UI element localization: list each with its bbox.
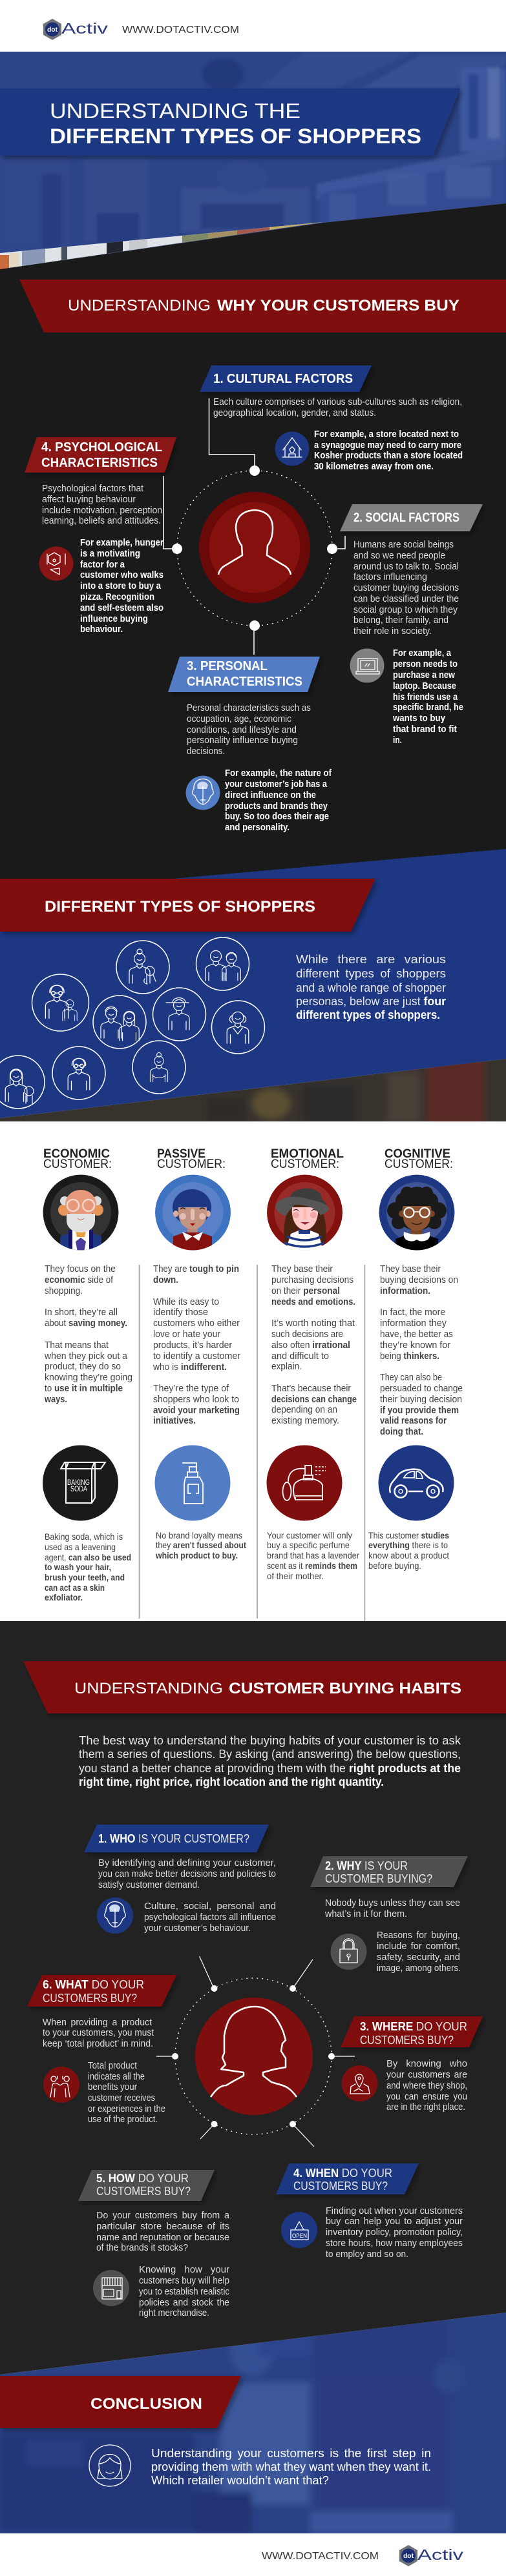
hero photo background bbox=[0, 52, 506, 271]
body text: products, it’s harder bbox=[153, 1340, 232, 1351]
central diagram: buyer silhouette bbox=[156, 1956, 355, 2147]
heading: CUSTOMER: bbox=[385, 1158, 453, 1171]
example text: to wash your hair, bbox=[45, 1562, 111, 1572]
panel: how do your customers buy: of the brands it stocks? bbox=[96, 2242, 188, 2253]
example text: which product to buy. bbox=[155, 1550, 238, 1560]
panel: personal characteristics: For example, the nature of bbox=[225, 768, 332, 779]
panel: psychological characteristics: is a motivating bbox=[80, 548, 140, 559]
body text: avoid your marketing bbox=[153, 1405, 240, 1416]
heading: COGNITIVE bbox=[385, 1147, 450, 1161]
panel: cultural factors: geographical location, gender, and status. bbox=[213, 407, 376, 418]
heading: CUSTOMER: bbox=[271, 1158, 339, 1171]
panel: what do your customers buy: or experiences in the bbox=[88, 2103, 165, 2114]
panel: why is your customer buying: Nobody buys unless they can see bbox=[325, 1897, 460, 1908]
diagram ring with central person bbox=[163, 398, 345, 655]
body text: information. bbox=[380, 1285, 430, 1296]
heading: CUSTOMER: bbox=[157, 1158, 226, 1171]
body text: to identify a customer bbox=[153, 1351, 240, 1362]
panel: social factors: can be classified under the bbox=[353, 593, 459, 604]
body text: decisions can change bbox=[271, 1394, 357, 1405]
panel: psychological characteristics: affect buying behaviour bbox=[42, 494, 136, 505]
panel: personal characteristics: decisions. bbox=[187, 746, 225, 757]
panel: social factors: in. bbox=[393, 735, 402, 746]
body text: depending on an bbox=[271, 1404, 337, 1415]
body text: also often irrational bbox=[271, 1340, 350, 1351]
intro text: and a whole range of shopper bbox=[296, 981, 446, 994]
panel: cultural factors: Each culture comprises of various sub-cultures such as religion, bbox=[213, 396, 462, 407]
conclusion banner: CONCLUSION bbox=[90, 2395, 202, 2413]
panel: psychological characteristics: learning, beliefs and attitudes. bbox=[42, 515, 161, 526]
body text: customers who either bbox=[153, 1318, 240, 1329]
body text: They base their bbox=[271, 1263, 333, 1274]
example text: This customer studies bbox=[368, 1530, 449, 1540]
panel: who is your customer: psychological factors all influence bbox=[144, 1912, 276, 1923]
header logo bbox=[43, 19, 109, 40]
footer logo: dot bbox=[403, 2553, 414, 2560]
example text: used as a leavening bbox=[45, 1542, 116, 1552]
dark section background: buying habits bbox=[0, 1621, 506, 2375]
shopper persona icons bbox=[0, 937, 265, 1109]
example text: brand that has a lavender bbox=[267, 1550, 359, 1560]
body text: if you provide them bbox=[380, 1405, 459, 1416]
body text: purchasing decisions bbox=[271, 1274, 353, 1285]
heading: EMOTIONAL bbox=[271, 1147, 344, 1161]
icon: dinner plate bbox=[39, 546, 74, 581]
panel: social factors: social group to which they bbox=[353, 604, 458, 615]
icon: map pin bbox=[341, 2065, 377, 2101]
panel: personal characteristics: Personal characteristics such as bbox=[187, 702, 311, 713]
panel: when do your customers buy bbox=[276, 2163, 463, 2260]
body text: product, they do so bbox=[45, 1361, 121, 1372]
conclusion banner bbox=[0, 2376, 241, 2428]
panel: psychological characteristics: behaviour. bbox=[80, 624, 123, 635]
column: passive customer bbox=[153, 1147, 246, 1560]
column: emotional customer bbox=[266, 1147, 359, 1581]
avatar: woman with blue bob bbox=[155, 1175, 231, 1251]
panel: psychological characteristics: For example, hunger bbox=[80, 537, 163, 548]
panel: where do your customers buy: your customers are bbox=[386, 2069, 467, 2080]
heading: ECONOMIC bbox=[43, 1147, 110, 1161]
body text bbox=[153, 1263, 240, 1426]
intro paragraph: The best way to understand the buying habits of your customer is to ask bbox=[79, 1734, 461, 1747]
intro paragraph: right time, right price, right location and the right quantity. bbox=[79, 1775, 384, 1788]
panel: who is your customer: 1. WHO IS YOUR CUSTOMER? bbox=[98, 1832, 249, 1845]
panel: who is your customer: your customer’s behaviour. bbox=[144, 1923, 251, 1934]
section banner: DIFFERENT TYPES OF SHOPPERS bbox=[45, 898, 315, 915]
panel: social factors: factors influencing bbox=[353, 571, 427, 582]
hero title banner: UNDERSTANDING THE bbox=[50, 99, 300, 123]
conclusion text bbox=[151, 2447, 431, 2487]
panel: what do your customers buy: Total product bbox=[88, 2060, 138, 2071]
panel: what do your customers buy bbox=[27, 1975, 176, 2125]
icon: synagogue bbox=[275, 431, 309, 466]
body text: such decisions are bbox=[271, 1329, 343, 1340]
panel: what do your customers buy: CUSTOMERS BUY? bbox=[43, 1992, 137, 2005]
panel: why is your customer buying: include for comfort, bbox=[377, 1941, 460, 1952]
panel: personal characteristics: personality influence buying bbox=[187, 735, 298, 746]
section banner: customer buying habits: CUSTOMER BUYING HABITS bbox=[229, 1680, 461, 1697]
panel: where do your customers buy bbox=[341, 2016, 483, 2112]
panel: psychological characteristics bbox=[25, 437, 176, 635]
panel: what do your customers buy: to your customers, you must bbox=[43, 2027, 154, 2038]
intro text: While there are various bbox=[296, 953, 446, 966]
panel: when do your customers buy: to employ and so on. bbox=[326, 2249, 408, 2260]
panel: social factors: Humans are social beings bbox=[353, 539, 454, 550]
panel: how do your customers buy: Knowing how your bbox=[139, 2264, 229, 2275]
panel: why is your customer buying: 2. WHY IS YOUR bbox=[325, 1859, 408, 1872]
heading bbox=[385, 1147, 453, 1171]
body text: have, the better as bbox=[380, 1329, 453, 1340]
panel: personal characteristics: occupation, age, economic bbox=[187, 713, 291, 724]
panel: how do your customers buy: you to establish realistic bbox=[139, 2286, 229, 2297]
panel: why is your customer buying: CUSTOMER BUYING? bbox=[325, 1872, 432, 1885]
body text: shoppers who look to bbox=[153, 1394, 239, 1405]
panel: cultural factors: 1. CULTURAL FACTORS bbox=[213, 372, 353, 386]
intro paragraph: you stand a better chance at providing them with the right products at the bbox=[79, 1762, 461, 1775]
panel: how do your customers buy: 5. HOW DO YOUR bbox=[96, 2172, 189, 2185]
body text: on their personal bbox=[271, 1285, 340, 1296]
body text: explain. bbox=[271, 1361, 302, 1372]
icon: open sign: OPEN bbox=[292, 2233, 307, 2239]
dark photo strip behind shopper types bbox=[0, 1059, 506, 1121]
icon: laptop bbox=[350, 648, 384, 683]
header url: WWW.DOTACTIV.COM bbox=[122, 25, 239, 36]
column dividers bbox=[140, 1265, 364, 1626]
heading bbox=[157, 1147, 226, 1171]
column: economic customer bbox=[43, 1147, 132, 1602]
panel: psychological characteristics: 4. PSYCHOLOGICAL bbox=[41, 440, 162, 455]
panel: social factors: belong, their family, and bbox=[353, 615, 448, 626]
panel: psychological characteristics: pizza. Recognition bbox=[80, 591, 154, 602]
panel: what do your customers buy: keep ‘total product’ in mind. bbox=[43, 2038, 153, 2049]
body text: when they pick out a bbox=[44, 1351, 128, 1362]
panel: personal characteristics: buy. So too does their age bbox=[225, 811, 329, 822]
icon: head with brain bbox=[97, 1897, 133, 1934]
panel: psychological characteristics: Psychological factors that bbox=[42, 483, 144, 494]
icon: baking soda box bbox=[43, 1445, 118, 1521]
conclusion photo background bbox=[0, 2305, 506, 2537]
body text bbox=[44, 1263, 132, 1405]
icon: baking soda box: SODA bbox=[70, 1484, 87, 1493]
section banner: customer buying habits bbox=[23, 1661, 506, 1713]
body text: being thinkers. bbox=[380, 1351, 439, 1362]
body text: information they bbox=[380, 1318, 447, 1329]
panel: social factors: customer buying decisions bbox=[353, 582, 459, 593]
icon: storefront bbox=[93, 2270, 129, 2306]
example text: before buying. bbox=[368, 1560, 421, 1571]
panel: psychological characteristics: and self-esteem also bbox=[80, 602, 163, 613]
body text: shopping. bbox=[45, 1285, 83, 1296]
body text: They focus on the bbox=[45, 1263, 116, 1274]
panel: how do your customers buy: CUSTOMERS BUY? bbox=[96, 2185, 191, 2198]
panel: who is your customer bbox=[84, 1825, 276, 1934]
panel: how do your customers buy bbox=[78, 2170, 230, 2318]
panel: where do your customers buy: CUSTOMERS BUY? bbox=[360, 2034, 454, 2047]
body text: knowing they’re going bbox=[45, 1372, 132, 1383]
section banner: why your customers buy bbox=[19, 280, 506, 332]
panel: why is your customer buying: safety, security, and bbox=[377, 1952, 460, 1963]
example text: exfoliator. bbox=[45, 1592, 83, 1602]
icon: pump bottle bbox=[155, 1445, 230, 1521]
body text: their buying decision bbox=[380, 1394, 462, 1405]
example text bbox=[368, 1530, 449, 1571]
intro paragraph: them a series of questions. By asking (and answering) the below questions, bbox=[79, 1748, 461, 1761]
icon: woman face bbox=[89, 2445, 131, 2486]
body text: In short, they’re all bbox=[45, 1307, 118, 1318]
example text: No brand loyalty means bbox=[156, 1530, 242, 1540]
hero title banner bbox=[0, 88, 460, 156]
body text bbox=[380, 1263, 463, 1437]
panel: cultural factors bbox=[200, 365, 463, 472]
example text: brush your teeth, and bbox=[45, 1572, 125, 1582]
example text: everything there is to bbox=[368, 1540, 448, 1550]
panel: what do your customers buy: use of the product. bbox=[88, 2114, 158, 2125]
body text: identify those bbox=[153, 1307, 208, 1318]
avatar: woman with hat bbox=[267, 1175, 343, 1251]
example text: know about a product bbox=[368, 1550, 449, 1560]
avatar: old man bbox=[43, 1175, 119, 1252]
body text: ways. bbox=[44, 1394, 67, 1405]
panel: how do your customers buy: name and reputation or because bbox=[96, 2232, 229, 2243]
body text: about saving money. bbox=[45, 1318, 127, 1329]
body text: While its easy to bbox=[153, 1296, 219, 1307]
icon: open sign bbox=[281, 2212, 317, 2248]
panel: when do your customers buy: inventory policy, promotion policy, bbox=[326, 2227, 463, 2238]
panel: who is your customer: satisfy customer demand. bbox=[98, 1879, 200, 1890]
panel: psychological characteristics: influence buying bbox=[80, 613, 148, 624]
panel: how do your customers buy: right merchandise. bbox=[139, 2307, 209, 2318]
conclusion text: providing them with what they want when they want it. bbox=[151, 2460, 431, 2473]
intro text: personas, below are just four bbox=[296, 995, 446, 1008]
panel: social factors: their role in society. bbox=[353, 626, 432, 637]
hero title banner: DIFFERENT TYPES OF SHOPPERS bbox=[50, 125, 421, 148]
body text: That’s because their bbox=[271, 1383, 351, 1394]
panel: personal characteristics: and personality. bbox=[225, 822, 290, 833]
panel: cultural factors: a synagogue may need to carry more bbox=[314, 440, 461, 451]
panel: when do your customers buy: 4. WHEN DO YOUR bbox=[293, 2167, 392, 2180]
panel: cultural factors: Kosher products than a store located bbox=[314, 450, 463, 461]
panel: psychological characteristics: include motivation, perception, bbox=[42, 505, 165, 516]
panel: what do your customers buy: indicates all the bbox=[88, 2071, 145, 2082]
example text: scent as it reminds them bbox=[267, 1560, 357, 1571]
panel: why is your customer buying bbox=[310, 1856, 468, 1974]
section banner: customer buying habits: UNDERSTANDING bbox=[74, 1680, 223, 1697]
body text: initiatives. bbox=[153, 1415, 196, 1426]
icon: two people bbox=[43, 2067, 79, 2103]
panel: social factors: that brand to fit bbox=[393, 724, 457, 735]
panel: where do your customers buy: you can ensure you bbox=[386, 2091, 467, 2102]
header logo: Activ bbox=[61, 20, 109, 37]
body text: economic side of bbox=[45, 1274, 114, 1285]
panel: social factors: person needs to bbox=[393, 659, 458, 670]
panel: why is your customer buying: what’s in it for them. bbox=[324, 1908, 407, 1919]
panel: psychological characteristics: customer who walks bbox=[80, 569, 163, 580]
body text: They’re the type of bbox=[153, 1383, 229, 1394]
icon: car bbox=[379, 1445, 454, 1521]
panel: when do your customers buy: store hours, how many employees bbox=[326, 2238, 463, 2249]
body text: buying decisions on bbox=[380, 1274, 458, 1285]
example text: Your customer will only bbox=[267, 1530, 352, 1540]
panel: personal characteristics bbox=[168, 657, 332, 833]
panel: how do your customers buy: customers buy will help bbox=[139, 2275, 229, 2286]
panel: personal characteristics: 3. PERSONAL bbox=[187, 659, 268, 673]
panel: when do your customers buy: buy can help you to adjust your bbox=[326, 2216, 463, 2227]
panel: personal characteristics: conditions, and lifestyle and bbox=[187, 724, 297, 735]
example text: agent, can also be used bbox=[45, 1552, 131, 1562]
intro paragraph bbox=[79, 1734, 461, 1788]
column: cognitive customer bbox=[368, 1147, 463, 1571]
panel: where do your customers buy: 3. WHERE DO YOUR bbox=[360, 2020, 467, 2033]
panel: who is your customer: By identifying and defining your customer, bbox=[98, 1857, 276, 1868]
panel: what do your customers buy: When providing a product bbox=[43, 2017, 153, 2028]
panel: psychological characteristics: into a store to buy a bbox=[80, 580, 162, 591]
panel: social factors: and so we need people bbox=[353, 550, 445, 561]
body text bbox=[271, 1263, 357, 1426]
panel: when do your customers buy: Finding out when your customers bbox=[326, 2205, 463, 2216]
body text: doing that. bbox=[380, 1426, 423, 1437]
example text: can act as a skin bbox=[45, 1582, 105, 1593]
panel: how do your customers buy: Do your customers buy from a bbox=[96, 2210, 230, 2221]
body text: down. bbox=[153, 1274, 178, 1285]
heading bbox=[43, 1147, 112, 1171]
body text: valid reasons for bbox=[380, 1415, 447, 1426]
avatar: woman with curly hair bbox=[379, 1175, 455, 1251]
example text: of their mother. bbox=[267, 1571, 324, 1581]
body text: needs and emotions. bbox=[271, 1296, 355, 1307]
section banner bbox=[0, 879, 375, 932]
panel: psychological characteristics: CHARACTERISTICS bbox=[41, 456, 158, 470]
panel: where do your customers buy: and where they shop, bbox=[386, 2080, 467, 2091]
body text: They base their bbox=[380, 1263, 441, 1274]
example text: they aren't fussed about bbox=[156, 1540, 246, 1550]
panel: where do your customers buy: are in the right place. bbox=[386, 2101, 465, 2112]
footer logo: Activ bbox=[417, 2546, 464, 2563]
footer logo bbox=[399, 2545, 464, 2566]
icon: perfume bottle bbox=[266, 1445, 343, 1521]
hero unfiltered photo sliver bbox=[0, 222, 323, 269]
conclusion text: Understanding your customers is the first step in bbox=[151, 2447, 431, 2460]
intro text: different types of shoppers bbox=[296, 967, 446, 980]
icon: padlock bbox=[331, 1934, 367, 1970]
panel: how do your customers buy: policies and stock the bbox=[139, 2297, 229, 2308]
example text: Baking soda, which is bbox=[45, 1531, 123, 1542]
panel: cultural factors: For example, a store located next to bbox=[314, 429, 459, 440]
blue section: different types of shoppers bbox=[0, 849, 506, 1118]
panel: cultural factors: 30 kilometres away from one. bbox=[314, 461, 434, 472]
dark section background: why customers buy bbox=[0, 203, 506, 894]
panel: personal characteristics: direct influence on the bbox=[225, 790, 316, 801]
panel: what do your customers buy: benefits your bbox=[88, 2081, 137, 2092]
panel: when do your customers buy: CUSTOMERS BUY? bbox=[293, 2180, 388, 2193]
footer url: WWW.DOTACTIV.COM bbox=[262, 2551, 379, 2562]
panel: who is your customer: Culture, social, personal and bbox=[144, 1901, 276, 1912]
panel: social factors: around us to talk to. Social bbox=[353, 561, 459, 572]
heading bbox=[271, 1147, 344, 1171]
panel: how do your customers buy: particular store because of its bbox=[96, 2221, 229, 2232]
icon: baking soda box: BAKING bbox=[67, 1478, 90, 1487]
panel: social factors: wants to buy bbox=[392, 713, 446, 724]
body text: existing memory. bbox=[271, 1415, 339, 1426]
panel: social factors: laptop. Because bbox=[393, 680, 456, 691]
panel: personal characteristics: products and brands they bbox=[225, 801, 328, 812]
conclusion text: Which retailer wouldn’t want that? bbox=[151, 2474, 329, 2487]
header logo: dot bbox=[47, 26, 58, 34]
body text: and difficult to bbox=[271, 1351, 329, 1362]
intro text: different types of shoppers. bbox=[296, 1008, 440, 1021]
panel: social factors: purchase a new bbox=[393, 670, 455, 680]
icon: head with brain bbox=[186, 776, 220, 810]
body text: love or hate your bbox=[153, 1329, 220, 1340]
panel: what do your customers buy: 6. WHAT DO YOUR bbox=[43, 1978, 144, 1991]
body text: They can also be bbox=[380, 1372, 442, 1383]
panel: social factors: For example, a bbox=[393, 648, 452, 659]
body text: It’s worth noting that bbox=[271, 1318, 355, 1329]
section banner: why your customers buy: UNDERSTANDING bbox=[68, 297, 211, 314]
body text: They are tough to pin bbox=[153, 1263, 239, 1274]
panel: why is your customer buying: image, among others. bbox=[377, 1963, 461, 1974]
heading: PASSIVE bbox=[157, 1147, 206, 1161]
panel: psychological characteristics: factor for a bbox=[80, 559, 125, 570]
heading: CUSTOMER: bbox=[43, 1158, 112, 1171]
body text: who is indifferent. bbox=[153, 1362, 227, 1373]
panel: social factors bbox=[340, 504, 483, 746]
panel: where do your customers buy: By knowing who bbox=[386, 2058, 467, 2069]
example text bbox=[267, 1530, 359, 1581]
panel: personal characteristics: your customer’s job has a bbox=[225, 779, 328, 790]
body text: they’re known for bbox=[380, 1340, 450, 1351]
body text: In fact, the more bbox=[380, 1307, 445, 1318]
example text bbox=[155, 1530, 246, 1560]
example text: buy a specific perfume bbox=[267, 1540, 350, 1550]
body text: persuaded to change bbox=[380, 1383, 463, 1394]
panel: social factors: 2. SOCIAL FACTORS bbox=[353, 511, 459, 525]
panel: social factors: specific brand, he bbox=[393, 702, 463, 713]
section banner: why your customers buy: WHY YOUR CUSTOMERS BUY bbox=[217, 297, 459, 314]
body text: to use it in multiple bbox=[45, 1383, 123, 1394]
body text: That means that bbox=[45, 1340, 109, 1351]
panel: who is your customer: you can make better decisions and policies to bbox=[98, 1868, 276, 1879]
panel: what do your customers buy: customer receives bbox=[88, 2092, 155, 2103]
example text bbox=[45, 1531, 131, 1602]
panel: why is your customer buying: Reasons for buying, bbox=[377, 1930, 460, 1941]
panel: social factors: his friends use a bbox=[393, 691, 458, 702]
panel: personal characteristics: CHARACTERISTICS bbox=[187, 675, 302, 689]
intro text bbox=[296, 953, 446, 1021]
